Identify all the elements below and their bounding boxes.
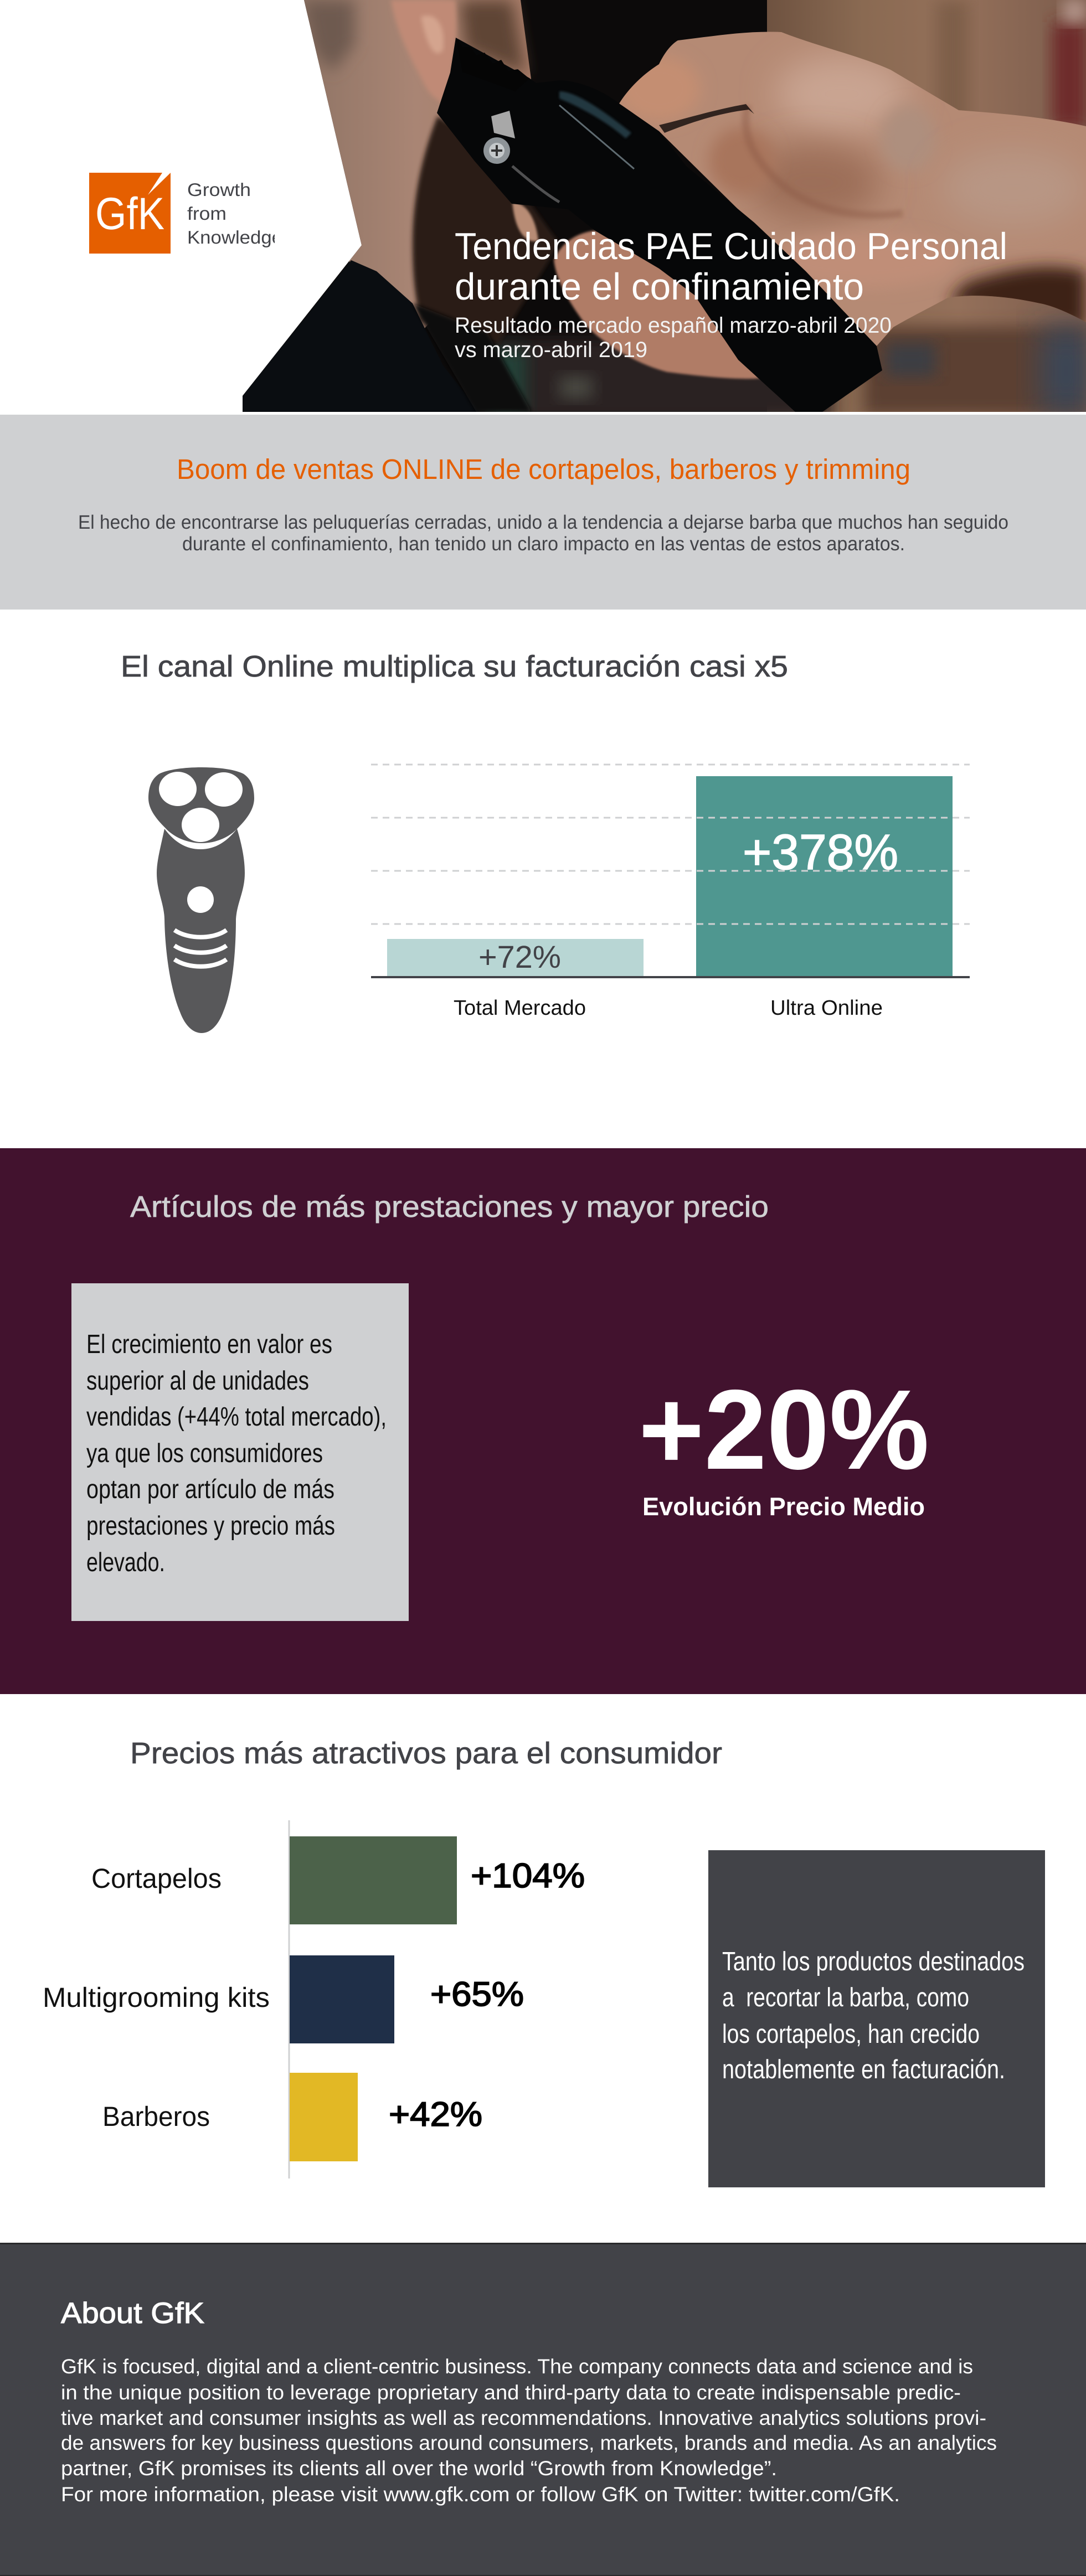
bar: multigrooming kits bbox=[290, 1955, 394, 2043]
about text: tive market and consumer insights as well as recommendations. Innovative analytics solutions provi- bbox=[61, 2407, 986, 2429]
bar: barberos bbox=[290, 2073, 358, 2161]
hero title: Tendencias PAE Cuidado Personal bbox=[455, 225, 1007, 267]
hero subtitle: Resultado mercado español marzo-abril 2020 bbox=[455, 313, 892, 338]
callout: crecimiento en valor bbox=[71, 1283, 409, 1621]
bar: total mercado bbox=[387, 939, 644, 977]
hero subtitle bbox=[455, 313, 892, 362]
about text: in the unique position to leverage proprietary and third-party data to create indispensable predic- bbox=[61, 2381, 961, 2404]
about text: GfK is focused, digital and a client-centric business. The company connects data and science and is bbox=[61, 2355, 973, 2378]
stat label: Evolución Precio Medio bbox=[642, 1492, 925, 1521]
about text: de answers for key business questions around consumers, markets, brands and media. As an analytics bbox=[61, 2432, 997, 2454]
section heading: Precios más atractivos para el consumidor bbox=[130, 1737, 722, 1770]
callout: facturacion: notablemente en facturación. bbox=[722, 2055, 1005, 2084]
value: +378%: +378% bbox=[743, 825, 898, 880]
icon: electric shaver bbox=[148, 767, 254, 1033]
label: total mercado: Total Mercado bbox=[454, 997, 586, 1020]
lower fingers bbox=[512, 202, 538, 241]
callout: facturacion: a recortar la barba, como bbox=[722, 1983, 969, 2012]
panel: boom de ventas intro bbox=[0, 415, 1086, 610]
callout: crecimiento en valor: El crecimiento en valor es bbox=[86, 1330, 332, 1359]
callout: facturacion bbox=[708, 1850, 1045, 2187]
bar chart: total mercado vs ultra online bbox=[371, 765, 970, 1020]
bar chart: categorias bbox=[43, 1820, 585, 2178]
GfK logo bbox=[89, 173, 282, 254]
stat: +20%: +20% bbox=[639, 1366, 929, 1493]
clipper metal clamp and screw bbox=[491, 111, 515, 138]
hero subtitle: vs marzo-abril 2019 bbox=[455, 338, 647, 362]
label: barberos: Barberos bbox=[102, 2101, 210, 2132]
label: cortapelos: Cortapelos bbox=[91, 1863, 222, 1894]
logo tagline: from bbox=[187, 203, 227, 224]
intro paragraph: El hecho de encontrarse las peluquerías cerradas, unido a la tendencia a dejarse barba que muchos han seguido bbox=[78, 512, 1008, 533]
logo tagline: Knowledge bbox=[187, 227, 282, 247]
callout: facturacion: los cortapelos, han crecido bbox=[722, 2020, 980, 2049]
white strip under hero bbox=[0, 412, 1086, 415]
panel: about GfK bbox=[0, 2243, 1086, 2576]
logo tagline bbox=[187, 183, 275, 247]
hero title bbox=[455, 225, 1007, 308]
about text: partner, GfK promises its clients all over the world “Growth from Knowledge”. bbox=[61, 2457, 777, 2480]
bar: cortapelos bbox=[290, 1836, 457, 1924]
callout: crecimiento en valor: superior al de unidades bbox=[86, 1366, 309, 1396]
intro paragraph: durante el confinamiento, han tenido un claro impacto en las ventas de estos aparatos. bbox=[182, 533, 905, 555]
callout: crecimiento en valor: optan por artículo de más bbox=[86, 1475, 334, 1504]
label: multigrooming kits: Multigrooming kits bbox=[43, 1982, 270, 2013]
value: +72%: +72% bbox=[478, 939, 561, 975]
hand bbox=[619, 32, 1086, 346]
hero photo: barber trimming beard bbox=[238, 0, 1086, 421]
callout: crecimiento en valor: vendidas (+44% total mercado), bbox=[86, 1402, 387, 1432]
section heading: El canal Online multiplica su facturación casi x5 bbox=[121, 650, 788, 683]
hero panel bbox=[89, 0, 1086, 412]
logo tagline: Growth bbox=[187, 179, 251, 200]
panel: articulos de mas prestaciones bbox=[0, 1148, 1086, 1694]
about text bbox=[61, 2355, 997, 2506]
face and neck bbox=[299, 0, 532, 332]
bar: ultra online bbox=[696, 776, 953, 977]
callout: crecimiento en valor: elevado. bbox=[86, 1548, 165, 1577]
value: +104%: +104% bbox=[471, 1857, 585, 1895]
beard bbox=[413, 116, 559, 343]
callout: facturacion: Tanto los productos destinados bbox=[722, 1947, 1025, 1976]
intro heading: Boom de ventas ONLINE de cortapelos, barberos y trimming bbox=[177, 453, 910, 485]
clipper body bbox=[437, 38, 882, 412]
value: +42%: +42% bbox=[389, 2095, 482, 2134]
label: ultra online: Ultra Online bbox=[770, 997, 883, 1020]
logo wordmark: GfK bbox=[95, 189, 164, 239]
black shirt bbox=[243, 260, 425, 396]
hero title: durante el confinamiento bbox=[455, 266, 864, 308]
about heading: About GfK bbox=[61, 2297, 204, 2330]
value: +65%: +65% bbox=[430, 1975, 524, 2014]
about text: For more information, please visit www.gfk.com or follow GfK on Twitter: twitter.com/GfK. bbox=[61, 2483, 900, 2506]
logo mark bbox=[89, 173, 171, 254]
section heading: Artículos de más prestaciones y mayor precio bbox=[130, 1190, 769, 1224]
panel: canal online bbox=[121, 650, 970, 1033]
intro paragraph bbox=[78, 512, 1008, 555]
panel: precios mas atractivos bbox=[43, 1737, 1045, 2187]
callout: crecimiento en valor: prestaciones y precio más bbox=[86, 1511, 335, 1541]
ear bbox=[391, 0, 456, 103]
callout: crecimiento en valor: ya que los consumidores bbox=[86, 1439, 323, 1468]
logo spark bbox=[148, 173, 171, 195]
